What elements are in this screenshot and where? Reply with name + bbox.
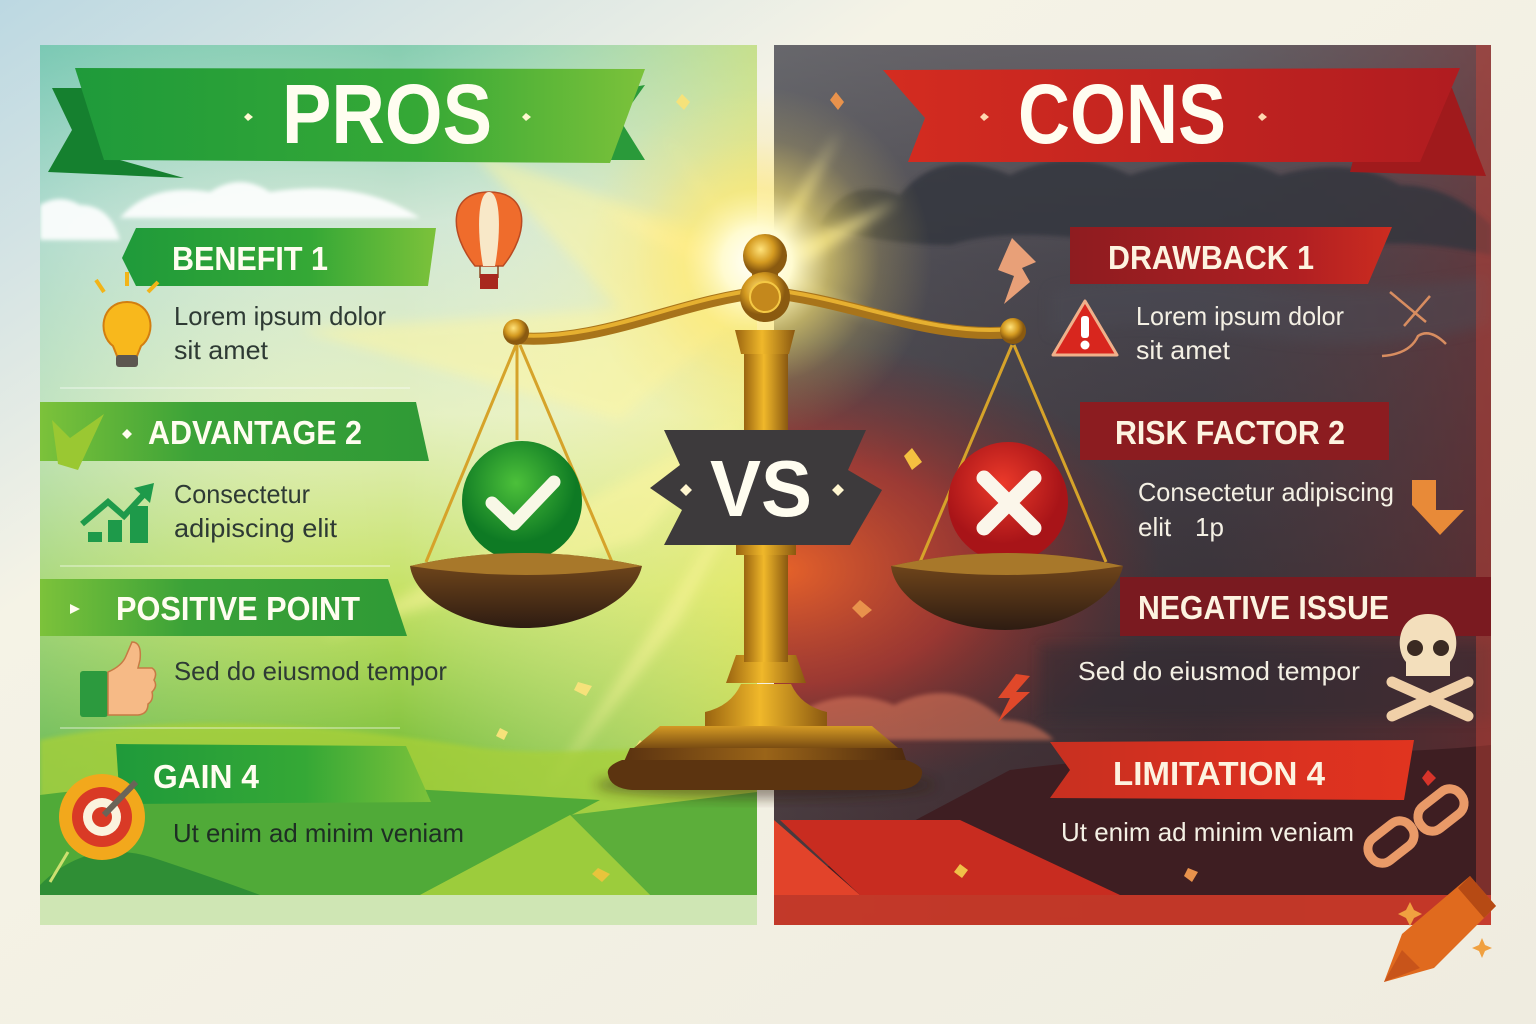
cons item 1: [1053, 227, 1446, 365]
cons item 3: [1078, 577, 1491, 716]
cons item 2: [1080, 402, 1464, 542]
scale beam: [516, 289, 1012, 339]
scale base: [608, 655, 922, 790]
cons item 4: Ut enim ad minim veniam: [1061, 817, 1354, 847]
sun glow: [582, 87, 932, 437]
pros item 4: [50, 744, 464, 882]
cons item 4: LIMITATION 4: [1113, 755, 1326, 792]
pros item 1: [96, 228, 436, 367]
pros item 3: POSITIVE POINT: [116, 590, 360, 627]
vs badge: VS: [710, 444, 812, 533]
icon: lightning: [998, 238, 1036, 304]
confetti pros: [496, 94, 690, 882]
pros item 2: adipiscing elit: [174, 513, 338, 543]
icon: broken line: [1382, 292, 1446, 356]
banner: cons title: [883, 67, 1486, 176]
icon: crayon: [1384, 876, 1496, 982]
icon: growth chart: [82, 483, 154, 543]
left scale pan: [410, 345, 642, 628]
cons item 3: NEGATIVE ISSUE: [1138, 589, 1389, 626]
pros item 4: GAIN 4: [153, 758, 260, 795]
pros item 2: ADVANTAGE 2: [148, 414, 362, 451]
icon: skull and crossbones: [1392, 614, 1468, 716]
pros item 3: [40, 579, 447, 717]
cons item 2: elit: [1138, 512, 1172, 542]
panel: cons: [774, 45, 1491, 925]
sun rays: [600, 130, 900, 330]
banner: pros title: PROS: [282, 67, 492, 161]
confetti cons: [830, 92, 1436, 882]
icon: warning triangle: [1053, 301, 1117, 355]
vs badge: [650, 430, 882, 545]
pros item 2: [40, 402, 429, 543]
pros item 2: Consectetur: [174, 479, 310, 509]
cons item 2: Consectetur adipiscing: [1138, 477, 1394, 507]
cons item 1: DRAWBACK 1: [1108, 239, 1314, 276]
pros item 1: BENEFIT 1: [172, 240, 328, 277]
icon: light bulb: [96, 272, 158, 367]
cons item 4: [1050, 740, 1469, 868]
icon: small lightning: [998, 674, 1030, 722]
scale top: [503, 234, 1026, 354]
icon: hot air balloon: [456, 192, 522, 289]
cons item 1: sit amet: [1136, 335, 1231, 365]
icon: target: [50, 774, 145, 882]
scale column: [736, 352, 796, 662]
banner: pros title: [48, 67, 645, 178]
cons item 2: 1p: [1195, 512, 1224, 542]
icon: thumbs up: [80, 642, 156, 717]
icon: broken chain: [1363, 784, 1469, 868]
icon: down arrow: [1412, 480, 1464, 535]
pros item 1: sit amet: [174, 335, 269, 365]
pros item 3: Sed do eiusmod tempor: [174, 656, 447, 686]
cons item 3: Sed do eiusmod tempor: [1078, 656, 1360, 686]
cons item 2: RISK FACTOR 2: [1115, 414, 1345, 451]
scales: [410, 234, 1123, 799]
panel: pros: [40, 45, 757, 925]
pros item 4: Ut enim ad minim veniam: [173, 818, 464, 848]
right scale pan: [891, 345, 1123, 630]
pros item 1: Lorem ipsum dolor: [174, 301, 386, 331]
cons item 1: Lorem ipsum dolor: [1136, 301, 1344, 331]
banner: cons title: CONS: [1018, 67, 1226, 161]
